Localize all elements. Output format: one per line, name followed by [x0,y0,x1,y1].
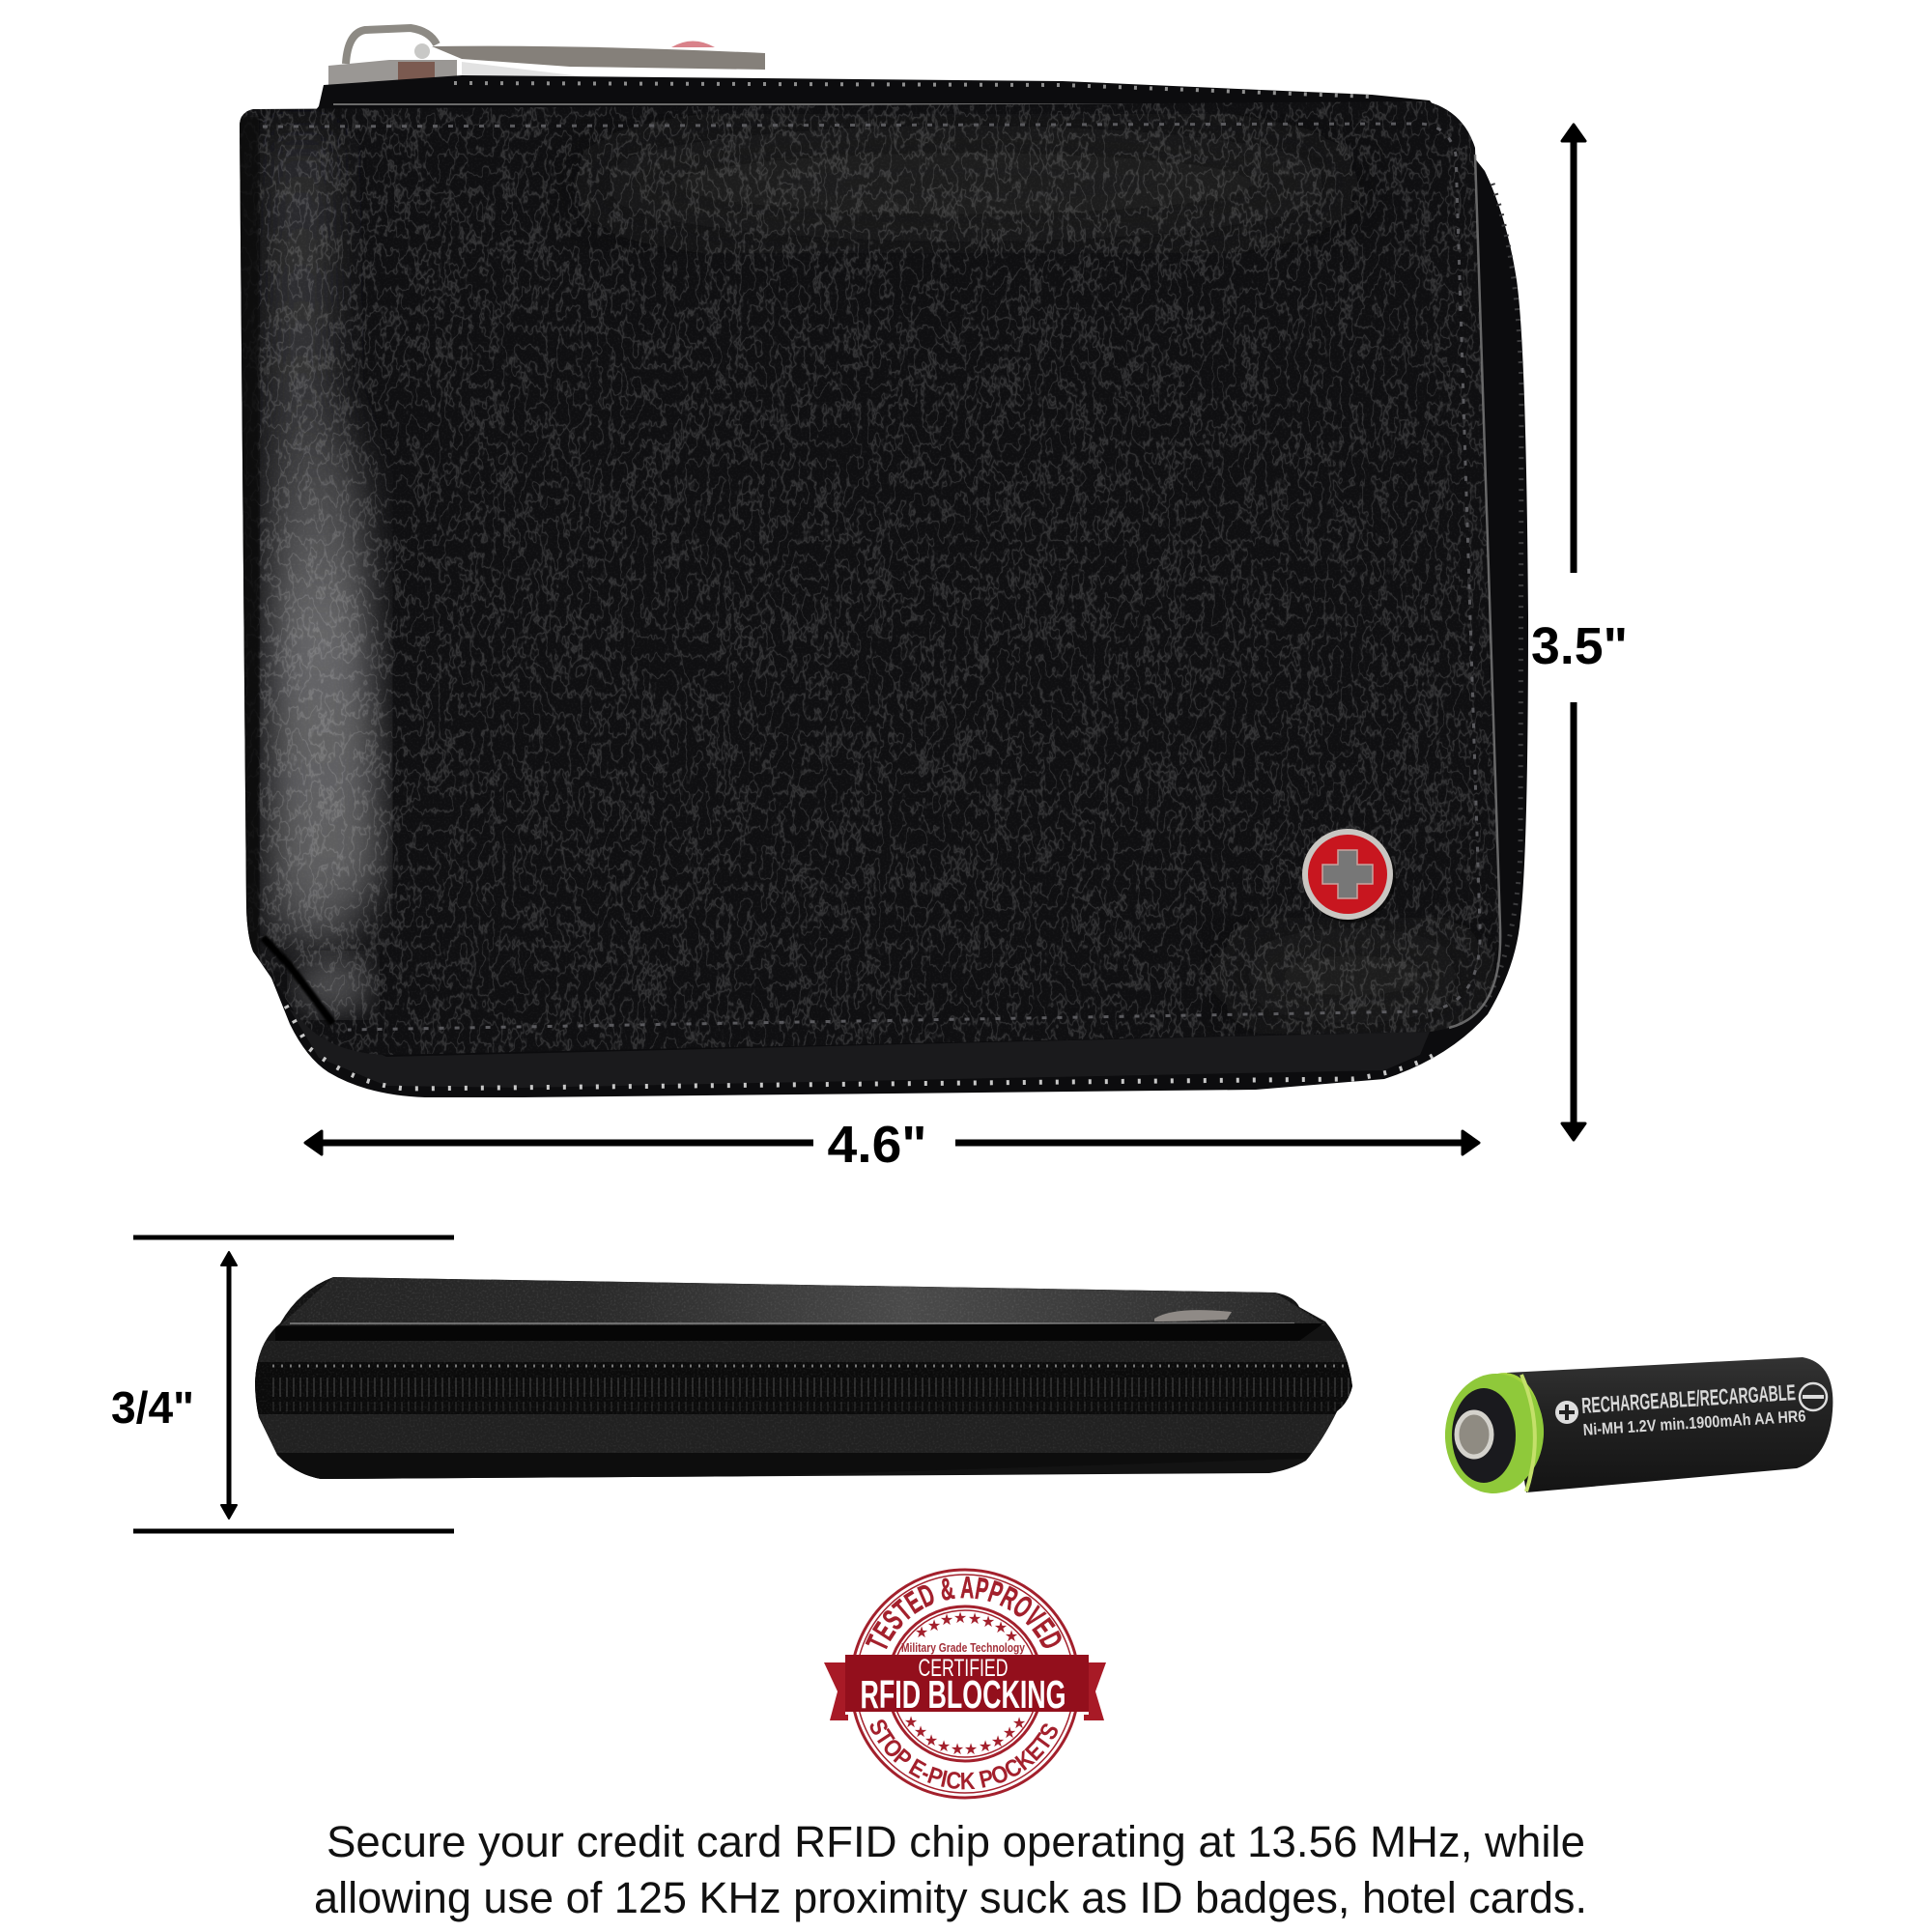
dark strip at left edge [240,115,260,956]
seam line below top zipper [333,103,1381,105]
upper zipper tape [253,1341,1354,1364]
stars: ★ [940,1612,953,1629]
stars: ★ [951,1742,964,1758]
photo: wallet side view [255,1277,1352,1479]
stars: ★ [964,1742,978,1758]
seal rings [851,1570,1079,1798]
zipper teeth bottom [280,995,1433,1089]
zipper teeth right [1483,184,1521,1009]
caption: allowing use of 125 KHz proximity suck as ID badges, hotel cards. [314,1873,1587,1922]
photo: wallet front view [232,28,1528,1097]
positive terminal [1457,1412,1492,1457]
lower zipper tape [253,1414,1354,1453]
arc text top: TESTED & APPROVED [866,1577,1062,1650]
ribbon tails [824,1662,848,1720]
stars: ★ [915,1625,928,1641]
thickness bracket and arrow [133,1237,454,1531]
bottom band [276,1453,1312,1479]
green rim [1459,1370,1546,1495]
photo: AA battery [1441,1357,1833,1496]
ribbon [845,1655,1089,1712]
caption [314,1817,1587,1922]
stars: ★ [1005,1629,1018,1645]
badge: RFID blocking seal: RFID BLOCKING [860,1672,1066,1717]
stars: ★ [979,1739,992,1755]
lower left crease [263,937,333,1024]
label: width: 4.6" [827,1116,927,1174]
label: thickness: 3/4" [111,1382,194,1433]
leather top [280,1277,1325,1325]
edge band [275,1323,1323,1341]
caption: Secure your credit card RFID chip operating at 13.56 MHz, while [327,1817,1585,1866]
stars: ★ [924,1733,938,1749]
leather sheen [270,135,382,956]
motto: Military Grade Technology [901,1640,1026,1655]
stars [904,1610,1026,1758]
stars: ★ [904,1715,918,1731]
zipper pull [328,28,765,87]
ribbon text: CERTIFIED [918,1655,1009,1682]
battery label [1580,1378,1806,1439]
stars: ★ [937,1739,951,1755]
front leather panel [232,97,1517,1063]
arrow: width 4.6 inches [305,1131,1479,1154]
minus symbol [1800,1383,1827,1410]
plus symbol [1555,1401,1578,1424]
label: height: 3.5" [1531,617,1628,675]
stars: ★ [927,1618,941,1634]
battery body [1507,1357,1833,1492]
battery label: Ni-MH 1.2V min.1900mAh AA HR6 [1582,1406,1806,1439]
battery end cap [1452,1388,1516,1483]
icon: red cross pin [1302,829,1396,923]
battery label: RECHARGEABLE/RECARGABLE [1580,1379,1797,1418]
stars: ★ [968,1611,981,1628]
arrow: height 3.5 inches [1562,125,1585,1140]
zipper tape shading bottom [290,1009,1430,1088]
stars: ★ [1003,1725,1016,1742]
arc text bottom: STOP E-PICK POCKETS [869,1719,1058,1789]
stars: ★ [991,1734,1005,1750]
stars: ★ [914,1724,927,1741]
maker pin on side [1154,1310,1232,1321]
stars: ★ [953,1610,967,1627]
stars: ★ [1012,1716,1026,1732]
zipper teeth [253,1362,1354,1414]
stars: ★ [981,1614,995,1631]
wallet body and zipper tape [246,75,1528,1097]
panel edge highlight [1449,155,1500,1028]
stars: ★ [994,1620,1008,1636]
badge: RFID blocking seal [824,1569,1106,1799]
stitching [263,124,1480,1030]
zipper teeth top [454,83,1372,97]
